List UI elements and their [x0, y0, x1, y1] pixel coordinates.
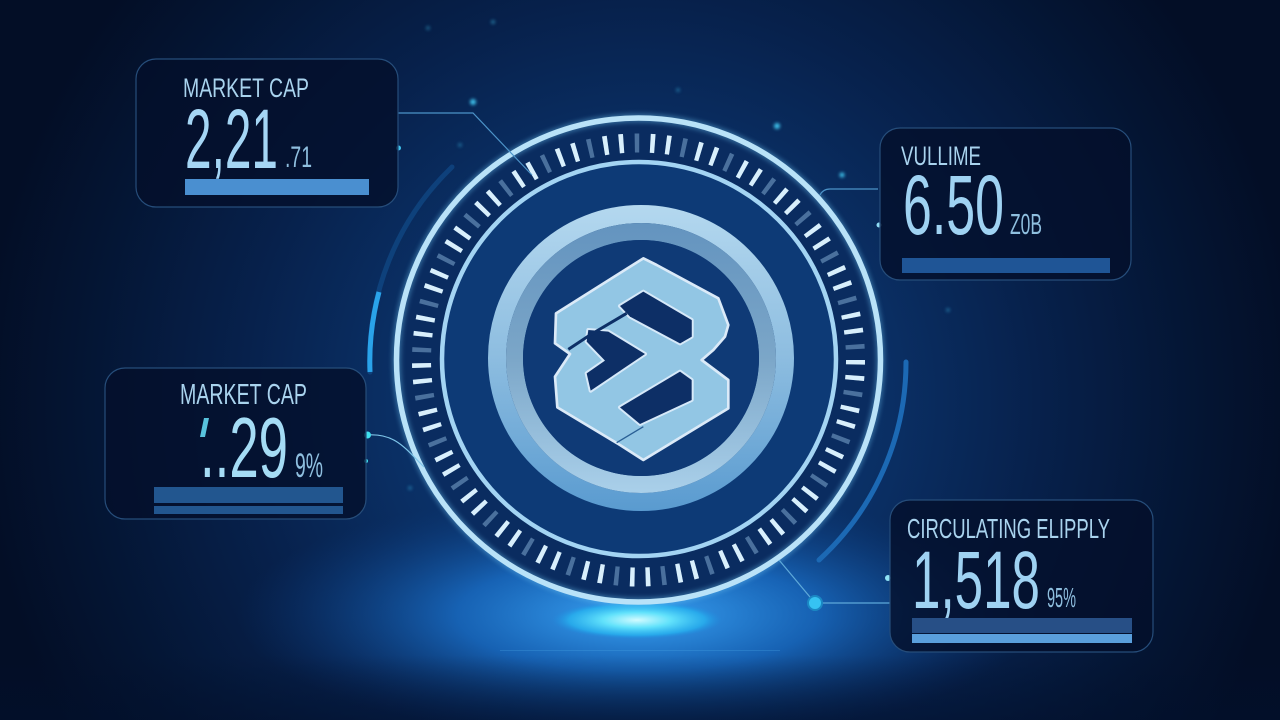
- logo strut: [680, 320, 692, 343]
- panel: circulating supply: [890, 500, 1153, 652]
- value: 2,21: [185, 92, 278, 186]
- connector: market cap lower: [364, 432, 424, 467]
- bar: [902, 258, 1110, 273]
- unit: .71: [285, 141, 312, 174]
- side arc: left: [370, 167, 452, 372]
- panel: market cap top: [136, 59, 398, 207]
- bar: [185, 179, 369, 195]
- tick marks dim: [422, 143, 856, 577]
- central coin dial: [396, 118, 880, 602]
- logo body: [555, 258, 728, 460]
- side arc: right: [819, 362, 906, 560]
- dial inner face: [443, 161, 837, 555]
- logo seam upper: [568, 313, 627, 349]
- logo cut top: [620, 292, 692, 343]
- panel: market cap lower: [105, 368, 366, 519]
- label: MARKET CAP: [180, 379, 307, 411]
- value: 6.50: [903, 158, 1004, 252]
- bars: [154, 487, 343, 503]
- hub ring inner band: [514, 232, 768, 484]
- connector: market cap top: [396, 113, 532, 175]
- inner ring: [442, 162, 836, 556]
- floating particles: [408, 20, 987, 490]
- hub core: [523, 240, 759, 476]
- connector: circulating supply: [779, 560, 891, 610]
- logo cut lower: [620, 372, 692, 424]
- unit: Z0B: [1010, 209, 1042, 241]
- bars: [912, 618, 1132, 633]
- label: CIRCULATING ELIPPLY: [907, 513, 1110, 544]
- logo seam lower: [617, 427, 643, 443]
- label: MARKET CAP: [183, 73, 309, 103]
- unit: 95%: [1047, 582, 1076, 613]
- label: VULLIME: [901, 141, 981, 171]
- connector: volume: [820, 189, 882, 228]
- value tick: [200, 418, 209, 437]
- outer ring: [396, 118, 880, 602]
- logo: [555, 258, 728, 460]
- dial face: [396, 118, 880, 602]
- hub ring outer band: [497, 214, 785, 502]
- panel: volume: [880, 128, 1131, 280]
- logo cut arrow: [587, 330, 645, 391]
- value: 1,518: [912, 535, 1040, 626]
- value: ..29: [200, 401, 288, 496]
- tick marks bright: [422, 143, 856, 577]
- floor glow: [0, 490, 1280, 720]
- unit: 9%: [295, 447, 323, 485]
